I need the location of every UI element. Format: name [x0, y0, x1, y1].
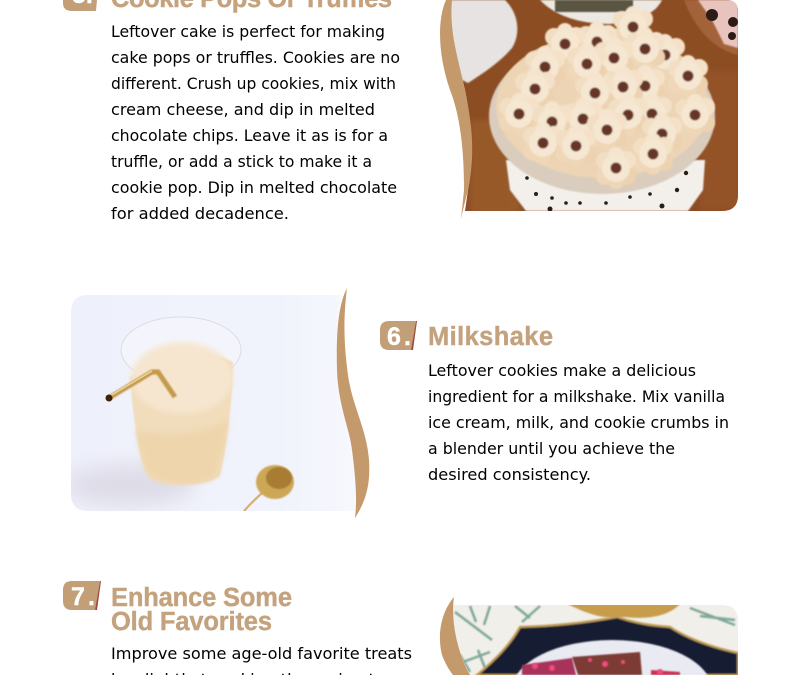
panel: section 6 milkshake — [65, 288, 729, 518]
text block: section 5 description: cream cheese, and dip in melted — [111, 100, 375, 119]
text block: section 6 description — [428, 361, 729, 484]
heading: milkshake: Milkshake — [428, 323, 553, 351]
heading: enhance some old favorites: Old Favorites — [111, 608, 272, 636]
text block: section 6 description: ingredient for a milkshake. Mix vanilla — [428, 387, 725, 406]
swoosh: tan curve right of photo — [337, 288, 369, 518]
text block: section 5 description: truffle, or add a stick to make it a — [111, 152, 372, 171]
panel: section 7 enhance some old favorites — [63, 581, 740, 675]
badge: number 6 — [380, 321, 417, 351]
text block: section 5 description: Leftover cake is perfect for making — [111, 22, 385, 41]
panel: section 5 cookie pops or truffles — [63, 0, 740, 223]
text block: section 5 description: cake pops or truffles. Cookies are no — [111, 48, 400, 67]
text block: section 5 description: chocolate chips. Leave it as is for a — [111, 126, 388, 145]
swoosh: tan curve left of photo — [440, 597, 470, 675]
text block: section 5 description: different. Crush up cookies, mix with — [111, 74, 396, 93]
photo: bowl of flower cookies — [440, 0, 740, 215]
text block: section 7 description — [111, 644, 412, 675]
photo: brownies on a gold-rimmed navy plate — [445, 604, 740, 675]
text block: section 6 description: desired consistency. — [428, 465, 591, 484]
badge: number 7: 7. — [71, 583, 95, 611]
text block: section 5 description: cookie pop. Dip in melted chocolate — [111, 178, 397, 197]
badge: number 7 — [63, 581, 101, 611]
swoosh: tan curve left of photo — [440, 0, 472, 219]
text block: section 5 description: for added decadence. — [111, 204, 289, 223]
badge: number 6: 6. — [387, 323, 411, 351]
text block: section 6 description: ice cream, milk, and cookie crumbs in — [428, 413, 729, 432]
heading: enhance some old favorites — [111, 584, 292, 636]
heading: enhance some old favorites: Enhance Some — [111, 584, 292, 612]
badge: number 5 — [63, 0, 97, 11]
text block: section 5 description — [111, 22, 400, 223]
text block: section 7 description: Improve some age-old favorite treats — [111, 644, 412, 663]
text block: section 6 description: Leftover cookies make a delicious — [428, 361, 696, 380]
text block: section 6 description: a blender until you achieve the — [428, 439, 675, 458]
photo: milkshake glass with gold straw and spoon — [65, 294, 370, 512]
